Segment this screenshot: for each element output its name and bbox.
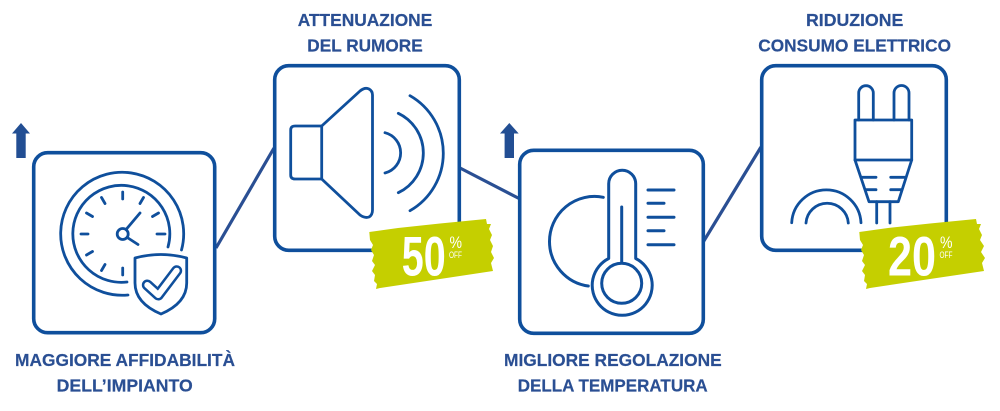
arrow up: temperature (500, 123, 519, 158)
torn tape (859, 219, 985, 289)
arrow up: reliability (12, 123, 30, 158)
panel frame (520, 150, 703, 333)
heading: reliability: MAGGIORE AFFIDABILITÀ (15, 349, 235, 370)
connector: panel 1 to panel 2 (216, 148, 274, 248)
panel: noise (275, 66, 459, 250)
value: 50 (402, 224, 446, 288)
value: 20 (888, 224, 936, 288)
icon: loudspeaker (291, 88, 443, 217)
connector: panel 2 to panel 3 (460, 168, 522, 200)
icon: plug (792, 86, 912, 223)
panel: power (762, 66, 946, 250)
heading: temperature: MIGLIORE REGOLAZIONE (504, 350, 722, 370)
heading: noise: DEL RUMORE (307, 36, 423, 56)
heading: noise: ATTENUAZIONE (298, 10, 432, 30)
percent: % (450, 233, 462, 252)
badge: 20% off (859, 219, 985, 289)
panel: reliability (34, 153, 215, 333)
panel frame (275, 66, 459, 250)
heading: power (758, 10, 951, 56)
panel frame (762, 66, 946, 250)
panel: temperature (520, 150, 703, 333)
heading: reliability (15, 349, 235, 396)
percent: % (940, 233, 952, 252)
heading: noise (298, 10, 432, 56)
badge: 50% off (369, 219, 494, 289)
off: OFF (940, 250, 953, 260)
heading: temperature (504, 350, 722, 396)
icon: thermometer (549, 170, 674, 315)
heading: power: CONSUMO ELETTRICO (758, 36, 951, 56)
icon: clock with shield (61, 172, 187, 314)
heading: temperature: DELLA TEMPERATURA (518, 376, 708, 396)
off: OFF (449, 250, 462, 260)
torn tape (369, 219, 494, 289)
panel frame (34, 153, 215, 333)
connector: panel 3 to panel 4 (702, 147, 761, 244)
heading: power: RIDUZIONE (806, 10, 903, 30)
heading: reliability: DELL’IMPIANTO (57, 376, 193, 396)
